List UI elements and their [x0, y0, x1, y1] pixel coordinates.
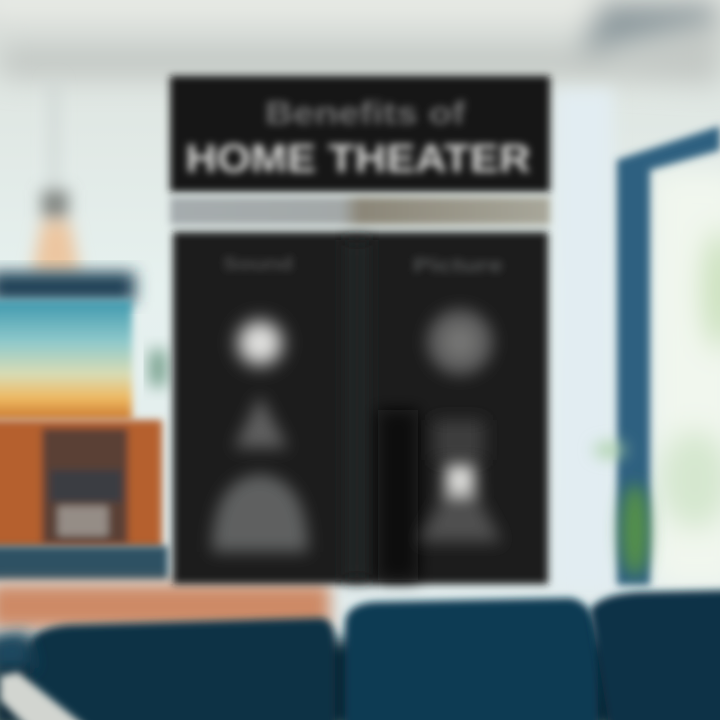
icon: right triangle [418, 464, 502, 542]
wall light right of board [555, 90, 613, 590]
sofa base [0, 640, 720, 720]
panel: board body [173, 232, 548, 584]
icon: left triangle [234, 395, 288, 448]
icon: left circle [233, 316, 287, 370]
painting [0, 300, 132, 420]
icon: right column shape [434, 420, 484, 460]
panel: board header [170, 76, 550, 192]
left column label: Sound [223, 254, 293, 274]
window view [652, 170, 720, 590]
sofa [0, 590, 720, 720]
sofa cushion middle [345, 598, 598, 720]
sofa arm left [0, 632, 35, 668]
heading line 2: HOME THEATER [186, 137, 531, 181]
heading line 1: Benefits of [265, 95, 465, 131]
divider strip [170, 197, 550, 225]
icon: right circle [427, 309, 493, 375]
floor corner [0, 672, 90, 720]
painting frame top [0, 272, 135, 302]
floor [0, 584, 330, 628]
right column label: Picture [413, 255, 503, 277]
cabinet [0, 420, 162, 548]
window [594, 126, 720, 590]
sofa cushion right [590, 590, 720, 720]
plant [594, 443, 649, 576]
pendant lamp [32, 80, 80, 274]
window frame [617, 126, 720, 585]
sofa cushion left [30, 618, 335, 720]
ceiling [0, 0, 720, 85]
icon: left dome [212, 474, 308, 552]
blue shelf [0, 546, 168, 580]
wall art [0, 272, 135, 420]
